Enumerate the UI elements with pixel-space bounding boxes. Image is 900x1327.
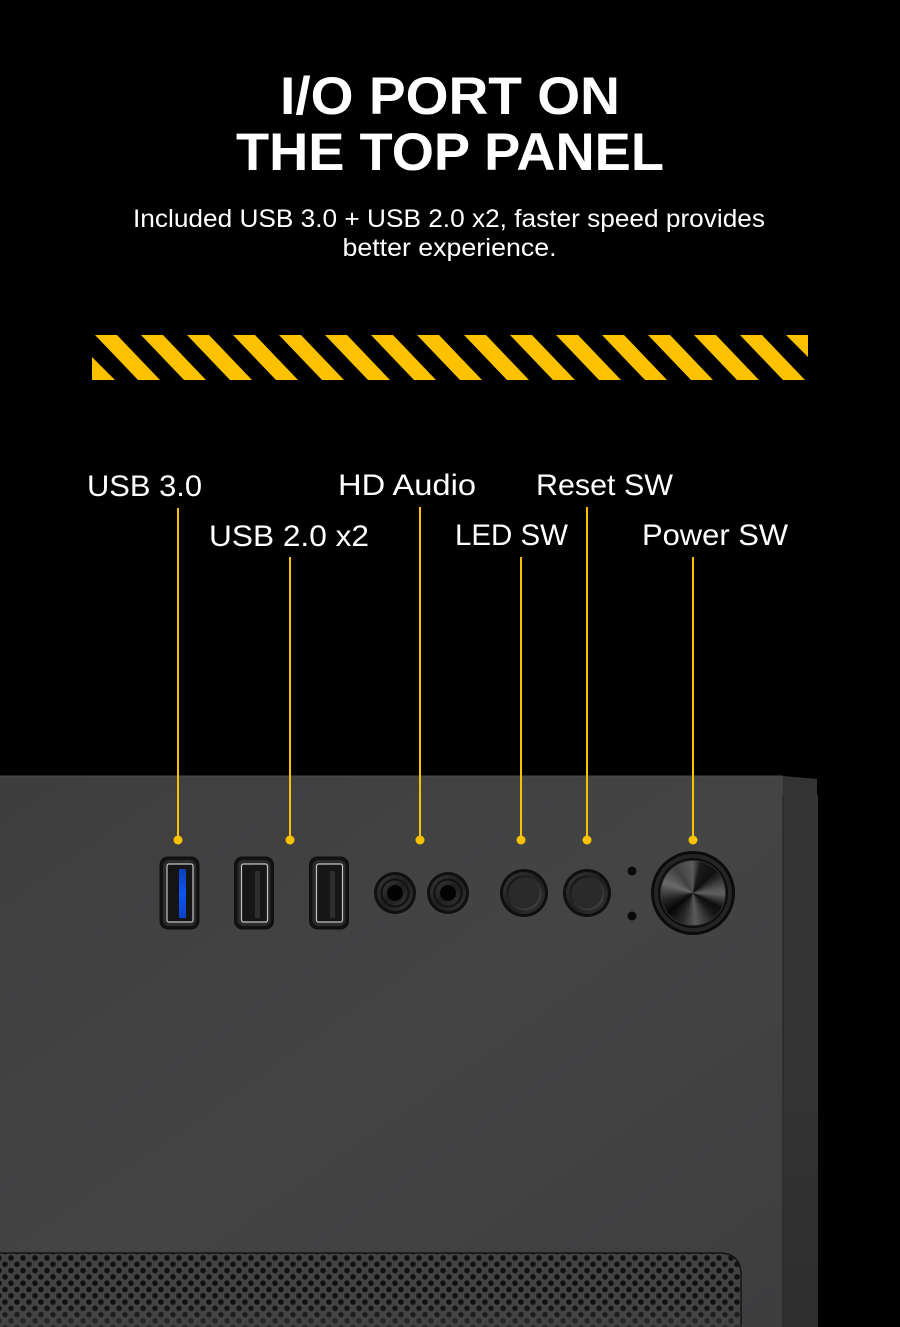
- callout: Reset SW: [536, 469, 674, 844]
- callout: USB 2.0 x2: USB 2.0 x2: [209, 520, 369, 553]
- callout: HD Audio: HD Audio: [338, 469, 476, 502]
- hazard stripe band: [92, 335, 808, 380]
- callout: LED SW: [455, 519, 569, 844]
- LED switch button: [500, 869, 548, 917]
- title: [236, 67, 664, 182]
- reset switch button: [563, 869, 611, 917]
- case side edge: [783, 776, 818, 1327]
- callout: USB 3.0: USB 3.0: [87, 470, 202, 503]
- mesh grille: [0, 1253, 741, 1327]
- USB 2.0 port 2: [310, 857, 348, 929]
- callout: LED SW: LED SW: [455, 519, 569, 552]
- indicator holes: [628, 866, 636, 920]
- power button knob: [651, 851, 735, 935]
- callout: Power SW: Power SW: [642, 519, 789, 552]
- callout: USB 2.0 x2: [209, 520, 369, 844]
- USB 2.0 port 1: [234, 857, 274, 929]
- HD audio jack 2: [427, 872, 469, 914]
- case front face: [0, 776, 783, 1327]
- callout: USB 3.0: [87, 470, 202, 844]
- subtitle: better experience.: [342, 234, 556, 262]
- computer case top panel: [0, 776, 818, 1327]
- subtitle: [133, 205, 765, 262]
- title: I/O PORT ON: [280, 67, 620, 126]
- callout: HD Audio: [338, 469, 476, 844]
- callout: Power SW: [642, 519, 789, 844]
- callout: Reset SW: Reset SW: [536, 469, 674, 502]
- title: THE TOP PANEL: [236, 123, 664, 182]
- subtitle: Included USB 3.0 + USB 2.0 x2, faster speed provides: [133, 205, 765, 233]
- HD audio jack 1: [374, 872, 416, 914]
- USB 3.0 port: [160, 857, 199, 929]
